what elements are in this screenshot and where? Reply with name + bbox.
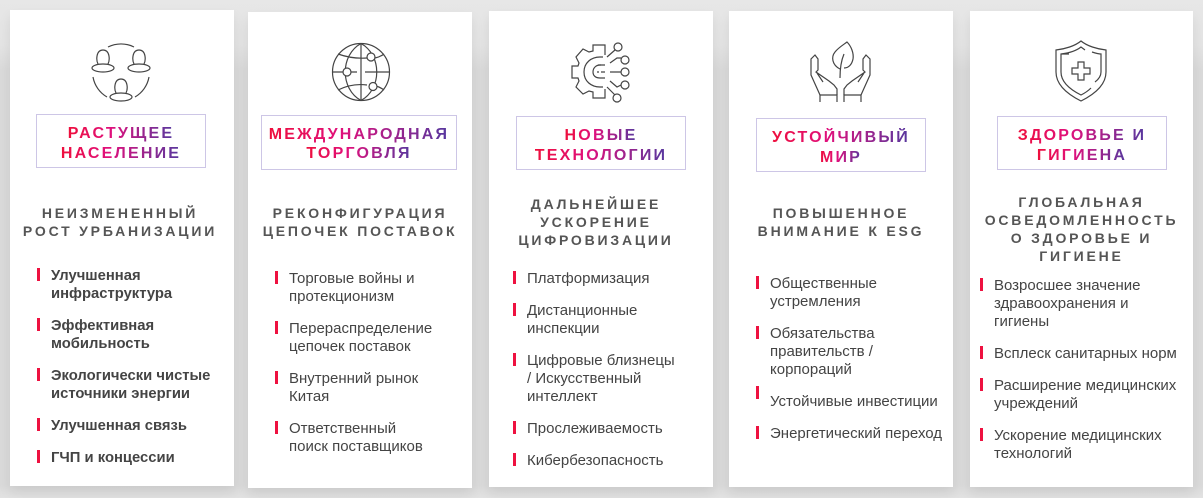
bullet	[980, 427, 1162, 462]
bullet: протекционизм	[289, 288, 394, 305]
bullet: Обязательства	[770, 325, 875, 342]
bullet	[756, 325, 875, 378]
bullet: Экологически чистые	[51, 368, 210, 384]
bullet	[275, 420, 423, 455]
subheading	[985, 194, 1178, 264]
bullet: Общественные	[770, 275, 877, 292]
bullet	[37, 368, 210, 402]
subheading: ОСВЕДОМЛЕННОСТЬ	[985, 212, 1178, 228]
title line: МЕЖДУНАРОДНАЯ	[269, 126, 449, 143]
panel: health and hygiene	[970, 11, 1193, 487]
bullet: Улучшенная связь	[51, 418, 187, 434]
panel: new technologies	[489, 11, 713, 487]
title line: ЗДОРОВЬЕ И	[1018, 127, 1146, 144]
title box	[261, 115, 457, 170]
bullet: ГЧП и концессии	[51, 450, 175, 466]
title box	[516, 116, 686, 170]
bullet	[980, 277, 1140, 330]
bullet: инфраструктура	[51, 286, 172, 302]
title box	[36, 114, 206, 168]
bullet: Кибербезопасность	[527, 452, 664, 469]
bullet: источники энергии	[51, 386, 190, 402]
bullet	[756, 275, 877, 310]
icon: gear circuit	[571, 42, 630, 103]
icon: globe	[332, 42, 390, 102]
subheading	[518, 196, 674, 248]
title line: ТОРГОВЛЯ	[306, 145, 412, 162]
subheading: О ЗДОРОВЬЕ И	[1011, 230, 1152, 246]
subheading	[263, 205, 457, 239]
bullet	[275, 270, 415, 305]
panel: growing population	[10, 10, 234, 486]
bullet: Торговые войны и	[289, 270, 415, 287]
bullet: Ускорение медицинских	[994, 427, 1162, 444]
subheading	[23, 205, 217, 239]
subheading: РОСТ УРБАНИЗАЦИИ	[23, 223, 217, 239]
bullet: Устойчивые инвестиции	[770, 393, 938, 410]
bullet	[756, 386, 938, 410]
bullet: гигиены	[994, 313, 1049, 330]
title box	[997, 116, 1167, 170]
subheading: ПОВЫШЕННОЕ	[773, 205, 909, 221]
bullet: правительств /	[770, 343, 873, 360]
subheading: УСКОРЕНИЕ	[540, 214, 652, 230]
bullet: интеллект	[527, 388, 598, 405]
bullet: Расширение медицинских	[994, 377, 1176, 394]
bullet	[37, 268, 172, 302]
bullet: Прослеживаемость	[527, 420, 663, 437]
subheading: ДАЛЬНЕЙШЕЕ	[531, 196, 661, 212]
bullet: Энергетический переход	[770, 425, 942, 442]
bullet: Китая	[289, 388, 329, 405]
bullet	[37, 318, 154, 352]
bullet: мобильность	[51, 336, 150, 352]
bullet: Ответственный	[289, 420, 396, 437]
bullet: Дистанционные	[527, 302, 637, 319]
bullet: устремления	[770, 293, 861, 310]
bullet: инспекции	[527, 320, 600, 337]
title line: МИР	[820, 149, 862, 166]
subheading: ЦЕПОЧЕК ПОСТАВОК	[263, 223, 457, 239]
subheading: ЦИФРОВИЗАЦИИ	[518, 232, 674, 248]
panel: sustainable world	[729, 11, 953, 487]
title line: НАСЕЛЕНИЕ	[61, 145, 181, 162]
title line: РАСТУЩЕЕ	[68, 125, 174, 142]
icon: shield with cross	[1055, 40, 1107, 102]
bullet: Цифровые близнецы	[527, 352, 675, 369]
bullet: Улучшенная	[51, 268, 141, 284]
icon: hands and leaf	[810, 41, 871, 102]
bullet: корпораций	[770, 361, 852, 378]
bullet	[513, 352, 675, 405]
icon: people	[91, 43, 151, 102]
bullet	[275, 320, 432, 355]
subheading: НЕИЗМЕНЕННЫЙ	[42, 205, 198, 221]
bullet: технологий	[994, 445, 1072, 462]
bullet: цепочек поставок	[289, 338, 411, 355]
bullet: здравоохранения и	[994, 295, 1128, 312]
subheading: РЕКОНФИГУРАЦИЯ	[273, 205, 447, 221]
bullet: Возросшее значение	[994, 277, 1140, 294]
title line: ТЕХНОЛОГИИ	[535, 147, 667, 164]
title line: ГИГИЕНА	[1037, 147, 1127, 164]
title line: НОВЫЕ	[565, 127, 637, 144]
subheading: ГИГИЕНЕ	[1039, 248, 1124, 264]
bullet: Всплеск санитарных норм	[994, 345, 1177, 362]
subheading	[758, 205, 924, 239]
bullet	[513, 302, 637, 337]
title line: УСТОЙЧИВЫЙ	[772, 129, 910, 146]
subheading: ВНИМАНИЕ К ESG	[758, 223, 924, 239]
panel: international trade	[248, 12, 472, 488]
bullet: Эффективная	[51, 318, 154, 334]
bullet: / Искусственный	[527, 370, 641, 387]
title box	[756, 118, 926, 172]
subheading: ГЛОБАЛЬНАЯ	[1018, 194, 1145, 210]
bullet: Перераспределение	[289, 320, 432, 337]
bullet	[275, 370, 418, 405]
bullet: Платформизация	[527, 270, 649, 287]
bullet	[980, 377, 1176, 412]
bullet: поиск поставщиков	[289, 438, 423, 455]
bullet: учреждений	[994, 395, 1078, 412]
bullet: Внутренний рынок	[289, 370, 418, 387]
